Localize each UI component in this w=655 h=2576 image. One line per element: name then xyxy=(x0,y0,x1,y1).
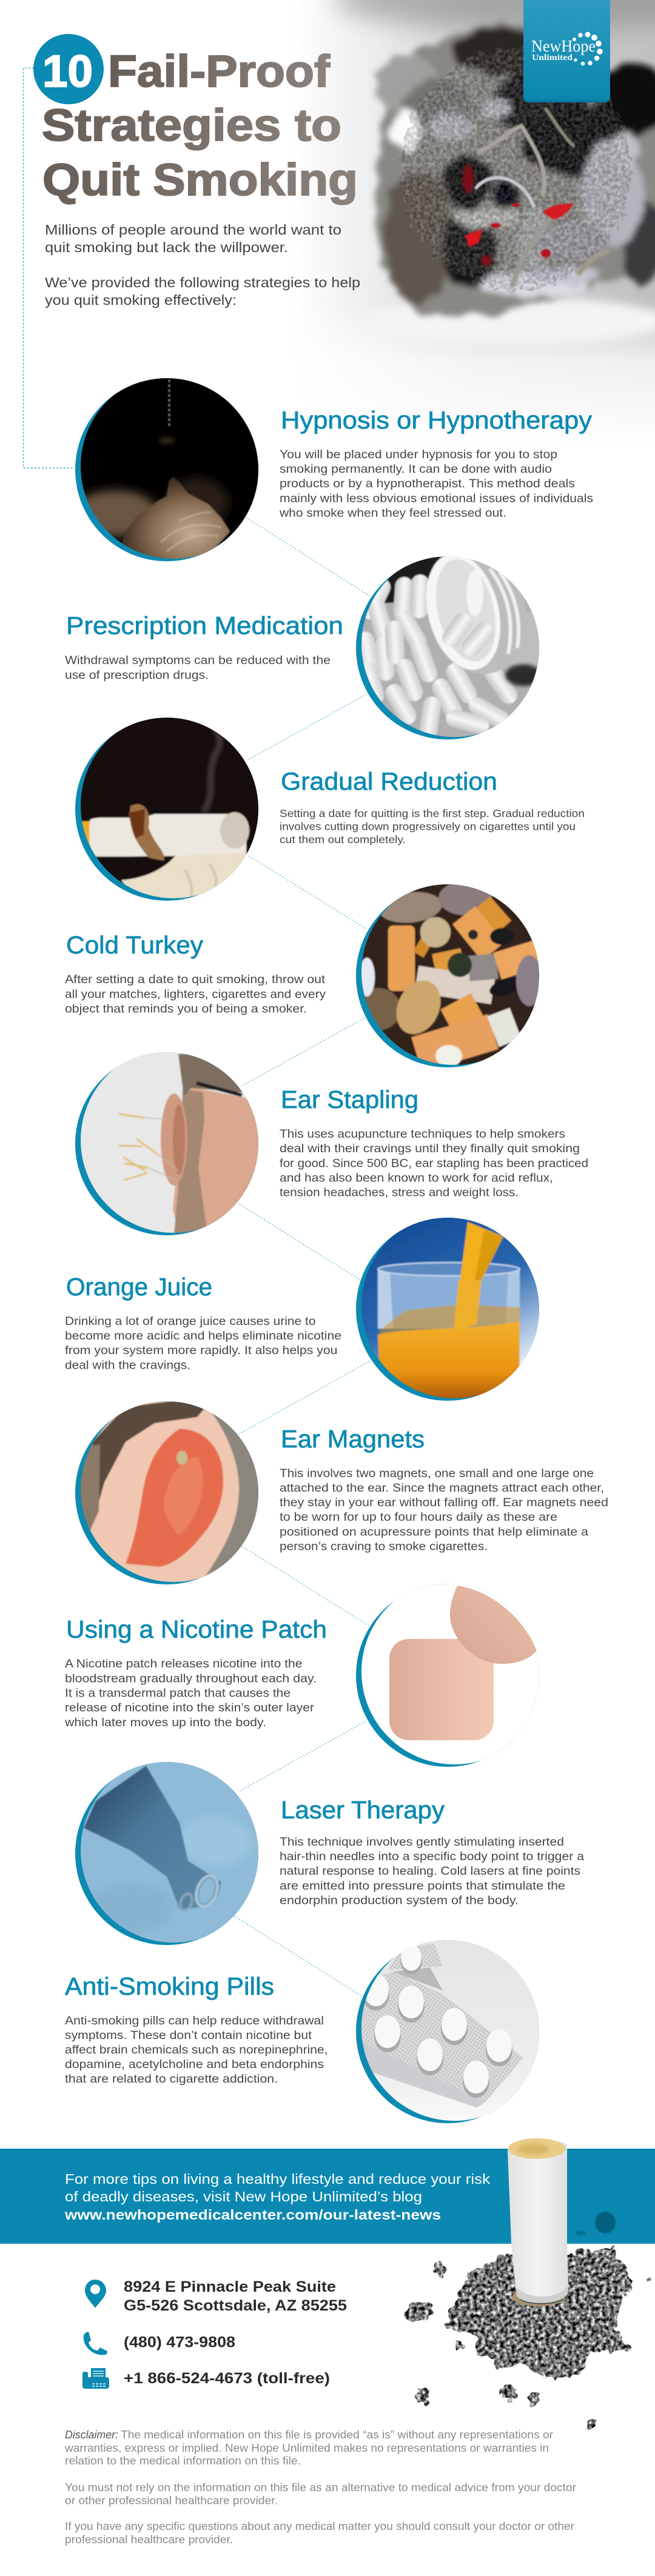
icon: location pin xyxy=(85,2280,106,2308)
title: Fail-Proof xyxy=(108,46,330,96)
ash pile xyxy=(404,2247,652,2429)
body text: deal with their cravings until they finally quit smoking xyxy=(280,1142,580,1155)
banner: blog call to action: of deadly diseases, visit New Hope Unlimited’s blog xyxy=(65,2189,422,2204)
body text: You will be placed under hypnosis for you to stop xyxy=(280,448,557,461)
body text: and has also been known to work for acid reflux, xyxy=(280,1171,553,1184)
title: Quit Smoking xyxy=(42,155,358,205)
body text xyxy=(280,1467,608,1553)
body text: mainly with less obvious emotional issues of individuals xyxy=(280,492,593,506)
body text: object that reminds you of being a smoker. xyxy=(65,1003,307,1016)
body text: affect brain chemicals such as norepinephrine, xyxy=(65,2043,328,2057)
body text: from your system more rapidly. It also helps you xyxy=(65,1344,337,1357)
body text: Withdrawal symptoms can be reduced with the xyxy=(65,653,331,667)
number badge: 10 xyxy=(33,34,104,104)
body text: Anti-smoking pills can help reduce withdrawal xyxy=(65,2014,324,2027)
body text: person’s craving to smoke cigarettes. xyxy=(280,1540,488,1553)
body text: to be worn for up to four hours daily as these are xyxy=(280,1510,557,1524)
body text: products or by a hypnotherapist. This method deals xyxy=(280,477,575,490)
panel: anti-smoking pills xyxy=(64,1940,539,2123)
body text: hair-thin needles into a specific body point to trigger a xyxy=(280,1850,584,1863)
body text xyxy=(64,1657,317,1729)
header photo: burning cigarette tip xyxy=(291,0,655,449)
address xyxy=(124,2278,347,2314)
body text xyxy=(65,973,326,1016)
toll-free number: +1 866-524-4673 (toll-free) xyxy=(124,2370,330,2387)
panel: prescription medication xyxy=(65,556,539,739)
photo: person under hypnosis xyxy=(75,378,258,561)
body text: tension headaches, stress and weight loss. xyxy=(280,1186,519,1199)
disclaimer: professional healthcare provider. xyxy=(65,2534,233,2546)
photo: cigarette stub in ashtray xyxy=(75,718,258,901)
cigarette stub xyxy=(508,2140,568,2300)
panel: gradual reduction xyxy=(70,712,585,912)
body text: that are related to cigarette addiction. xyxy=(65,2072,278,2086)
body text: This technique involves gently stimulating inserted xyxy=(280,1835,564,1849)
photo: cigarette butts in dirty water xyxy=(356,884,539,1067)
intro text: quit smoking but lack the willpower. xyxy=(45,239,288,255)
panel: orange juice xyxy=(65,1218,539,1401)
body text: use of prescription drugs. xyxy=(65,669,209,682)
body text: dopamine, acetylcholine and beta endorphins xyxy=(65,2058,324,2071)
body text: which later moves up into the body. xyxy=(64,1716,266,1729)
banner: blog call to action: For more tips on living a healthy lifestyle and reduce your risk xyxy=(65,2171,491,2187)
body text xyxy=(65,2014,328,2086)
body text: After setting a date to quit smoking, throw out xyxy=(65,973,326,986)
disclaimer xyxy=(64,2429,576,2546)
disclaimer: If you have any specific questions about any medical matter you should consult your doctor or other xyxy=(65,2520,574,2532)
disclaimer: Disclaimer: xyxy=(65,2429,118,2441)
panel: cold turkey xyxy=(65,884,539,1067)
body text: deal with the cravings. xyxy=(65,1359,190,1372)
body text: release of nicotine into the skin’s outer layer xyxy=(65,1701,315,1714)
body text: all your matches, lighters, cigarettes and every xyxy=(65,988,326,1001)
phone number: (480) 473-9808 xyxy=(124,2334,235,2351)
heading: Prescription Medication xyxy=(66,612,343,639)
body text: It is a transdermal patch that causes the xyxy=(65,1686,291,1700)
body text: who smoke when they feel stressed out. xyxy=(279,507,506,520)
disclaimer: relation to the medical information on this file. xyxy=(65,2455,301,2467)
heading: Using a Nicotine Patch xyxy=(66,1615,327,1643)
panel: ear magnets xyxy=(70,1396,608,1596)
icon: telephone handset xyxy=(84,2332,107,2355)
intro text: you quit smoking effectively: xyxy=(45,292,237,308)
body text xyxy=(280,1835,584,1907)
title: Strategies to xyxy=(42,100,341,150)
photo: white pills spilling from bottle xyxy=(356,556,539,739)
body text xyxy=(280,807,585,846)
banner: blog call to action xyxy=(0,2149,655,2244)
logo: New Hope Unlimited: NewHope xyxy=(531,37,596,55)
body text: attached to the ear. Since the magnets attract each other, xyxy=(280,1481,604,1495)
body text: natural response to healing. Cold lasers at fine points xyxy=(280,1864,580,1878)
disclaimer: or other professional healthcare provider. xyxy=(65,2495,278,2507)
panel: hypnosis or hypnotherapy xyxy=(70,373,593,573)
body text: This involves two magnets, one small and one large one xyxy=(280,1467,594,1480)
intro text: We’ve provided the following strategies to help xyxy=(45,275,360,290)
body text: This uses acupuncture techniques to help smokers xyxy=(280,1127,565,1141)
intro text xyxy=(45,222,360,308)
body text: are emitted into pressure points that stimulate the xyxy=(280,1879,565,1892)
heading: Gradual Reduction xyxy=(281,767,497,795)
body text: Drinking a lot of orange juice causes urine to xyxy=(65,1315,316,1328)
body text: positioned on acupressure points that help eliminate a xyxy=(280,1525,588,1538)
icon: fax machine xyxy=(82,2368,109,2389)
logo: New Hope Unlimited xyxy=(523,0,610,102)
body text: cut them out completely. xyxy=(280,833,406,846)
intro text: Millions of people around the world want to xyxy=(45,222,341,238)
body text: endorphin production system of the body. xyxy=(280,1894,519,1907)
heading: Ear Stapling xyxy=(281,1086,418,1113)
body text: involves cutting down progressively on cigarettes until you xyxy=(280,821,576,833)
body text xyxy=(279,448,593,520)
body text xyxy=(65,1315,341,1372)
dashed guide line from title to first circle xyxy=(23,68,74,468)
body text: bloodstream gradually throughout each day. xyxy=(65,1672,317,1685)
photo: blister pack of pills xyxy=(356,1940,539,2123)
banner: blog call to action: www.newhopemedicalcenter.com/our-latest-news xyxy=(64,2207,441,2223)
heading: Cold Turkey xyxy=(66,931,204,959)
body text xyxy=(280,1127,588,1199)
photo: orange juice pouring into glass xyxy=(356,1218,539,1401)
logo: New Hope Unlimited: Unlimited xyxy=(532,53,573,62)
body text: for good. Since 500 BC, ear stapling has been practiced xyxy=(280,1156,588,1170)
heading: Hypnosis or Hypnotherapy xyxy=(281,406,593,434)
heading: Laser Therapy xyxy=(281,1796,445,1824)
address: 8924 E Pinnacle Peak Suite xyxy=(124,2278,336,2295)
body text xyxy=(65,653,331,682)
heading: Orange Juice xyxy=(66,1273,212,1301)
heading: Anti-Smoking Pills xyxy=(65,1972,274,2000)
disclaimer: You must not rely on the information on this file as an alternative to medical advice from your doctor xyxy=(65,2481,576,2494)
disclaimer: warranties, express or implied. New Hope Unlimited makes no representations or warranties in xyxy=(64,2442,549,2454)
ash pile with stubbed cigarette xyxy=(404,2138,652,2429)
number badge: 10: 10 xyxy=(42,46,93,96)
body text: they stay in your ear without falling off. Ear magnets need xyxy=(280,1496,608,1509)
dotted connectors between circles xyxy=(234,518,371,1996)
body text: A Nicotine patch releases nicotine into the xyxy=(65,1657,302,1670)
heading: Ear Magnets xyxy=(281,1425,425,1453)
photo: acupuncture needles near ear xyxy=(75,1052,258,1235)
photo: magnet on ear xyxy=(75,1401,258,1584)
title xyxy=(33,34,358,205)
contact details xyxy=(82,2278,347,2389)
disclaimer: The medical information on this file is provided “as is” without any representations or xyxy=(121,2429,553,2441)
body text: smoking permanently. It can be done with audio xyxy=(280,462,552,476)
panel: ear stapling xyxy=(70,1047,588,1247)
photo: nicotine patches xyxy=(356,1584,539,1767)
panel: laser therapy xyxy=(70,1757,584,1957)
panel: using a nicotine patch xyxy=(65,1584,539,1767)
body text: symptoms. These don’t contain nicotine but xyxy=(65,2029,312,2042)
address: G5-526 Scottsdale, AZ 85255 xyxy=(124,2297,347,2314)
body text: Setting a date for quitting is the first step. Gradual reduction xyxy=(280,807,585,819)
body text: become more acidic and helps eliminate nicotine xyxy=(65,1329,341,1343)
photo: laser therapy handpiece xyxy=(75,1762,258,1945)
